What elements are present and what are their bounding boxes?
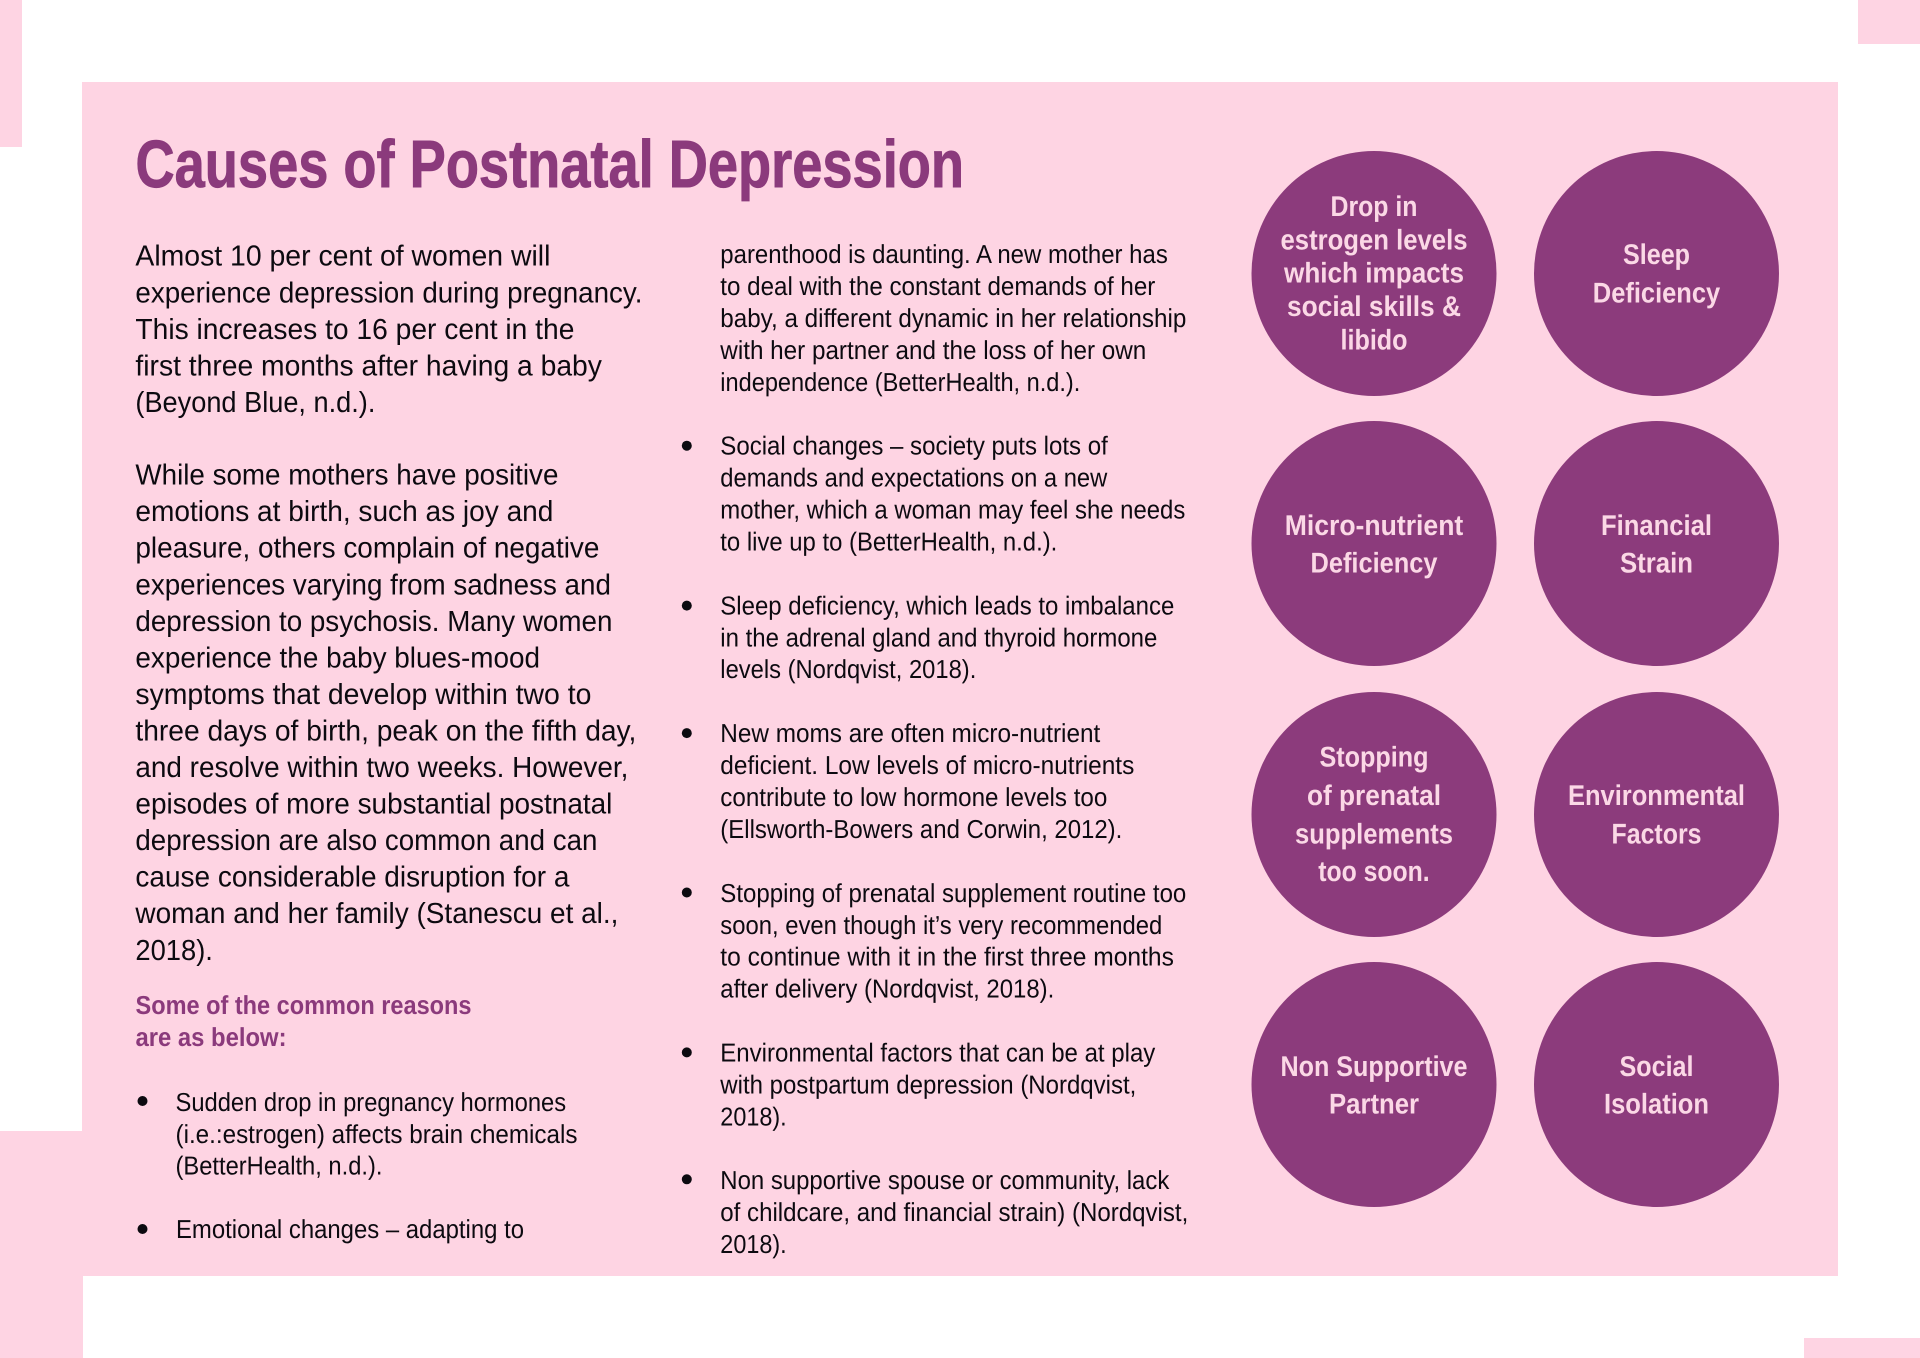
second paragraph: experiences varying from sadness and	[135, 569, 611, 601]
second paragraph: and resolve within two weeks. However,	[135, 752, 628, 784]
bullet: social changes: mother, which a woman may feel she needs	[720, 495, 1185, 525]
bullet: non supportive spouse	[682, 1165, 1188, 1259]
intro paragraph: first three months after having a baby	[135, 350, 602, 382]
intro paragraph: Almost 10 per cent of women will	[135, 241, 550, 273]
bullet: social changes	[682, 431, 1185, 557]
circle: financial strain: Financial	[1601, 510, 1712, 542]
circle: environmental factors	[1534, 692, 1779, 937]
bullet: sleep deficiency: Sleep deficiency, which leads to imbalance	[720, 590, 1174, 620]
corner block: bottom left	[0, 1131, 83, 1358]
bullet: non supportive spouse: of childcare, and financial strain) (Nordqvist,	[720, 1197, 1188, 1227]
corner block: top right	[1858, 0, 1920, 44]
bullet: sudden drop in hormones: (BetterHealth, n.d.).	[176, 1150, 382, 1180]
bullet: sleep deficiency	[682, 590, 1174, 684]
circle: social isolation: Isolation	[1604, 1088, 1709, 1120]
intro paragraph	[135, 241, 642, 419]
bullet: micro-nutrient deficient: contribute to low hormone levels too	[720, 782, 1107, 812]
subheading: common reasons	[136, 990, 472, 1052]
bullet: social changes: Social changes – society puts lots of	[720, 431, 1109, 461]
bullet continuation: emotional changes: baby, a different dynamic in her relationship	[720, 303, 1186, 333]
circle: social isolation: Social	[1620, 1051, 1694, 1083]
intro paragraph: experience depression during pregnancy.	[135, 277, 642, 309]
circle: stopping prenatal supplements: too soon.	[1318, 856, 1430, 888]
circle: stopping prenatal supplements: Stopping	[1320, 742, 1428, 774]
second paragraph: episodes of more substantial postnatal	[135, 789, 612, 821]
circle: stopping prenatal supplements: of prenatal	[1307, 780, 1441, 812]
intro paragraph: This increases to 16 per cent in the	[135, 314, 574, 346]
circle: drop in estrogen levels: which impacts	[1283, 258, 1464, 290]
circle: drop in estrogen levels: libido	[1340, 324, 1408, 356]
intro paragraph: (Beyond Blue, n.d.).	[135, 387, 375, 419]
subheading: common reasons: Some of the common reasons	[136, 990, 472, 1020]
second paragraph: depression to psychosis. Many women	[135, 606, 612, 638]
circle: financial strain: Strain	[1620, 548, 1693, 580]
circle: sleep deficiency: Sleep	[1623, 239, 1690, 271]
bullet: non supportive spouse: 2018).	[720, 1229, 787, 1259]
bullet: stopping prenatal supplements: to continue with it in the first three months	[720, 942, 1174, 972]
bullet: stopping prenatal supplements: after delivery (Nordqvist, 2018).	[720, 974, 1054, 1004]
bullet: sudden drop in hormones: (i.e.:estrogen) affects brain chemicals	[176, 1119, 578, 1149]
bullet: micro-nutrient deficient: (Ellsworth-Bowers and Corwin, 2012).	[720, 814, 1122, 844]
bullet: social changes: to live up to (BetterHealth, n.d.).	[720, 527, 1057, 557]
corner block: bottom right	[1804, 1338, 1920, 1358]
circle: drop in estrogen levels	[1252, 151, 1496, 396]
corner block: top left	[0, 0, 22, 147]
bullet: stopping prenatal supplements: Stopping of prenatal supplement routine too	[720, 878, 1186, 908]
bullet: micro-nutrient deficient: deficient. Low levels of micro-nutrients	[720, 750, 1134, 780]
bullet: sleep deficiency: levels (Nordqvist, 2018).	[720, 654, 976, 684]
bullet continuation: emotional changes: with her partner and the loss of her own	[719, 335, 1146, 365]
circle: micro-nutrient deficiency: Micro-nutrient	[1285, 510, 1464, 542]
second paragraph: depression are also common and can	[135, 825, 597, 857]
circle: environmental factors: Factors	[1612, 818, 1702, 850]
bullet continuation: emotional changes: to deal with the constant demands of her	[720, 271, 1156, 301]
bullet: sudden drop in hormones	[138, 1087, 578, 1180]
bullet: environmental factors: Environmental factors that can be at play	[720, 1037, 1155, 1067]
second paragraph: emotions at birth, such as joy and	[135, 496, 553, 528]
second paragraph: experience the baby blues-mood	[135, 642, 540, 674]
circle: drop in estrogen levels: estrogen levels	[1280, 224, 1468, 256]
circle: environmental factors: Environmental	[1568, 780, 1745, 812]
bullet: environmental factors	[682, 1037, 1155, 1131]
circle: financial strain	[1534, 421, 1779, 666]
circle: micro-nutrient deficiency	[1252, 421, 1496, 666]
bullet: sudden drop in hormones: Sudden drop in pregnancy hormones	[176, 1087, 566, 1117]
circle: stopping prenatal supplements	[1252, 692, 1496, 937]
bullet: social changes: demands and expectations on a new	[720, 463, 1108, 493]
bullet: stopping prenatal supplements: soon, even though it’s very recommended	[720, 910, 1162, 940]
circle: non supportive partner	[1252, 962, 1496, 1207]
second paragraph: woman and her family (Stanescu et al.,	[134, 898, 618, 930]
circle: sleep deficiency: Deficiency	[1593, 277, 1720, 309]
circle: sleep deficiency	[1534, 151, 1779, 396]
second paragraph: 2018).	[135, 935, 213, 967]
bullet: emotional changes: Emotional changes – adapting to	[176, 1214, 524, 1244]
bullet continuation: emotional changes: parenthood is daunting. A new mother has	[720, 239, 1168, 269]
circle: stopping prenatal supplements: supplements	[1295, 818, 1453, 850]
bullet continuation: emotional changes	[719, 239, 1186, 397]
second paragraph	[134, 460, 636, 967]
second paragraph: three days of birth, peak on the fifth day,	[135, 716, 636, 748]
title: Causes of Postnatal Depression	[136, 127, 964, 202]
second paragraph: pleasure, others complain of negative	[135, 533, 599, 565]
circle: drop in estrogen levels: social skills &	[1287, 291, 1461, 323]
second paragraph: symptoms that develop within two to	[135, 679, 591, 711]
second paragraph: cause considerable disruption for a	[135, 862, 570, 894]
circle: non supportive partner: Partner	[1329, 1088, 1419, 1120]
circle: non supportive partner: Non Supportive	[1280, 1051, 1468, 1083]
circle: drop in estrogen levels: Drop in	[1330, 191, 1418, 223]
bullet: sleep deficiency: in the adrenal gland and thyroid hormone	[720, 622, 1157, 652]
bullet: environmental factors: with postpartum depression (Nordqvist,	[719, 1069, 1136, 1099]
bullet: non supportive spouse: Non supportive spouse or community, lack	[720, 1165, 1170, 1195]
bullet: environmental factors: 2018).	[720, 1101, 787, 1131]
bullet: micro-nutrient deficient	[682, 718, 1134, 844]
subheading: common reasons: are as below:	[136, 1022, 286, 1052]
circle: micro-nutrient deficiency: Deficiency	[1310, 548, 1438, 580]
second paragraph: While some mothers have positive	[135, 460, 558, 492]
bullet: stopping prenatal supplements	[682, 878, 1186, 1004]
circle: social isolation	[1534, 962, 1779, 1207]
bullet continuation: emotional changes: independence (BetterHealth, n.d.).	[720, 367, 1080, 397]
bullet: micro-nutrient deficient: New moms are often micro-nutrient	[720, 718, 1101, 748]
